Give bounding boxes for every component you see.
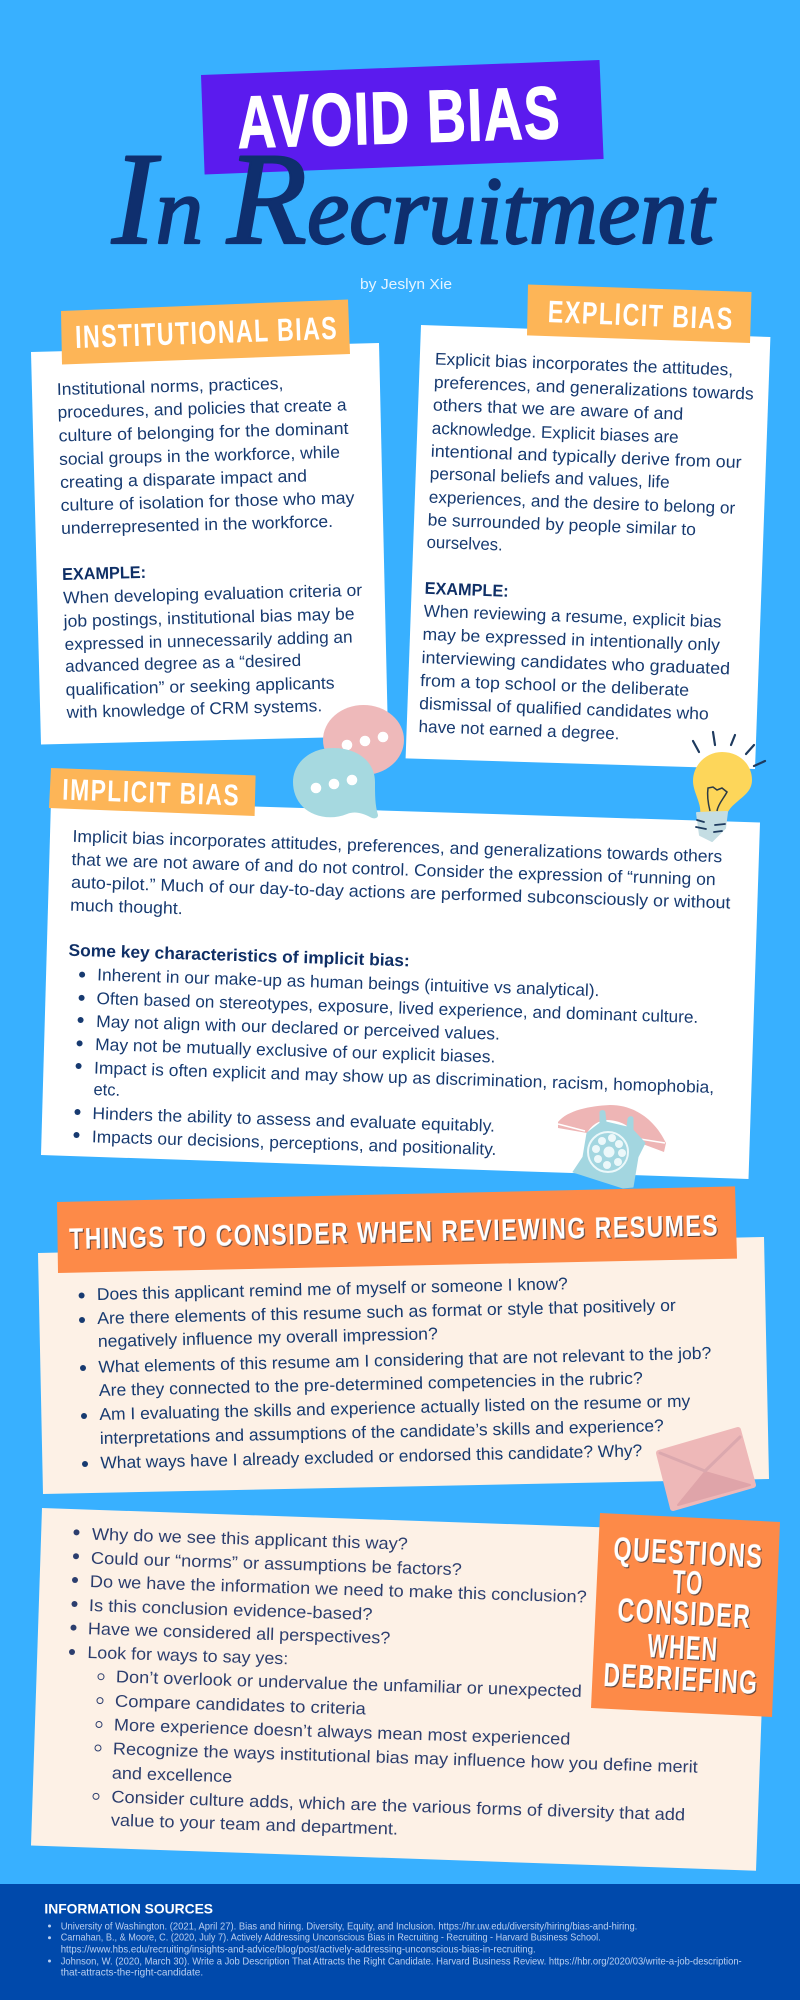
- panel: explicit bias: from a top school or the deliberate: [420, 671, 689, 700]
- panel: institutional bias: creating a disparate impact and: [60, 467, 307, 492]
- panel: institutional bias: qualification” or seeking applicants: [65, 673, 335, 699]
- panel: implicit bias: etc.: [93, 1080, 120, 1100]
- icon: light bulb: [693, 732, 765, 841]
- footer: information sources: that-attracts-the-right-candidate.: [61, 1966, 203, 1978]
- panel: implicit bias: May not be mutually exclusive of our explicit biases.: [95, 1035, 496, 1067]
- panel: institutional bias: EXAMPLE:: [62, 563, 146, 584]
- panel: implicit bias: May not align with our declared or perceived values.: [96, 1012, 500, 1044]
- panel: implicit bias: Some key characteristics of implicit bias:: [68, 941, 410, 970]
- title block: In Recruitment: [111, 125, 716, 272]
- panel: implicit bias: [41, 768, 760, 1179]
- panel: explicit bias: may be expressed in intentionally only: [422, 625, 721, 655]
- panel: implicit bias: much thought.: [70, 896, 183, 918]
- panel: explicit bias: experiences, and the desire to belong or: [428, 488, 736, 518]
- panel: institutional bias: expressed in unnecessarily adding an: [64, 627, 353, 654]
- panel: explicit bias: have not earned a degree.: [418, 717, 620, 743]
- panel: explicit bias: EXPLICIT BIAS: [547, 294, 734, 336]
- footer: information sources: University of Washington. (2021, April 27). Bias and hiring. Diversity, Equity, and Inclusion. https://hr.uw.edu/diversity/hiring/bias-and-hiring.: [61, 1920, 637, 1932]
- panel: institutional bias: underrepresented in the workforce.: [61, 512, 333, 538]
- footer: information sources: Johnson, W. (2020, March 30). Write a Job Description That Attracts the Right Candidate. Harvard Business Review. https://hbr.org/2020/03/write-a-job-description-: [61, 1956, 742, 1968]
- panel: questions to consider when debriefing: Why do we see this applicant this way?: [92, 1525, 408, 1554]
- panel: questions to consider when debriefing: WHEN: [647, 1627, 719, 1668]
- panel: institutional bias: culture of isolation for those who may: [60, 488, 355, 515]
- panel: institutional bias: culture of belonging for the dominant: [58, 419, 349, 445]
- panel: institutional bias: INSTITUTIONAL BIAS: [74, 310, 339, 355]
- panel: explicit bias: preferences, and generalizations towards: [434, 373, 754, 404]
- title block: [111, 60, 716, 272]
- panel: questions to consider when debriefing: Don’t overlook or undervalue the unfamiliar or unexpected: [116, 1667, 582, 1701]
- footer: information sources: [0, 1884, 800, 2000]
- panel: implicit bias: Often based on stereotypes, exposure, lived experience, and dominant culture.: [96, 989, 699, 1027]
- panel: questions to consider when debriefing: Compare candidates to criteria: [115, 1692, 367, 1719]
- panel: explicit bias: EXAMPLE:: [424, 579, 509, 601]
- panel: institutional bias: [31, 300, 388, 744]
- footer: information sources: https://www.hbs.edu/recruiting/insights-and-advice/blog/post/actively-addressing-unconscious-bias-in-recruiting.: [61, 1944, 536, 1956]
- panel: implicit bias: Hinders the ability to assess and evaluate equitably.: [92, 1104, 495, 1136]
- panel: implicit bias: Impacts our decisions, perceptions, and positionality.: [92, 1127, 497, 1159]
- panel: implicit bias: Impact is often explicit and may show up as discrimination, racism, homophobia,: [94, 1059, 714, 1097]
- panel: explicit bias: dismissal of qualified candidates who: [419, 694, 709, 724]
- panel: questions to consider when debriefing: TO: [672, 1563, 705, 1602]
- footer: information sources: Carnahan, B., & Moore, C. (2020, July 7). Actively Addressing Unconscious Bias in Recruiting - Recruiting - Harvard Business School.: [61, 1932, 601, 1944]
- byline: by Jeslyn Xie: [360, 276, 452, 293]
- panel: institutional bias: procedures, and policies that create a: [57, 395, 347, 422]
- panel: institutional bias: When developing evaluation criteria or: [63, 581, 363, 607]
- panel: things to consider when reviewing resumes: Does this applicant remind me of myself or someone I know?: [97, 1274, 568, 1304]
- panel: explicit bias: others that we are aware of and: [433, 396, 684, 424]
- panel: questions to consider when debriefing: Recognize the ways institutional bias may influence how you define merit: [113, 1739, 698, 1777]
- panel: institutional bias: social groups in the workforce, while: [59, 443, 340, 469]
- panel: questions to consider when debriefing: value to your team and department.: [111, 1811, 398, 1839]
- panel: things to consider when reviewing resumes: Are they connected to the pre-determined competencies in the rubric?: [99, 1369, 643, 1400]
- panel: questions to consider when debriefing: Is this conclusion evidence-based?: [89, 1596, 373, 1624]
- icon: speech bubbles: [293, 705, 404, 818]
- panel: things to consider when reviewing resumes: interpretations and assumptions of the candidate’s skills and experience?: [100, 1416, 664, 1448]
- icon: telephone: [558, 1105, 666, 1188]
- panel: things to consider when reviewing resumes: What ways have I already excluded or endorsed this candidate? Why?: [100, 1441, 642, 1472]
- panel: questions to consider when debriefing: Do we have the information we need to make this conclusion?: [90, 1572, 587, 1607]
- panel: implicit bias: IMPLICIT BIAS: [62, 774, 241, 812]
- panel: explicit bias: When reviewing a resume, explicit bias: [423, 602, 722, 631]
- panel: questions to consider when debriefing: Look for ways to say yes:: [87, 1643, 289, 1668]
- panel: explicit bias: Explicit bias incorporates the attitudes,: [435, 350, 734, 379]
- icon: envelope: [659, 1430, 753, 1508]
- panel: explicit bias: be surrounded by people similar to: [427, 510, 696, 539]
- panel: questions to consider when debriefing: and excellence: [112, 1764, 233, 1786]
- panel: explicit bias: interviewing candidates who graduated: [421, 648, 730, 678]
- panel: institutional bias: Institutional norms, practices,: [57, 374, 284, 399]
- panel: explicit bias: intentional and typically derive from our: [430, 442, 742, 472]
- panel: questions to consider when debriefing: Could our “norms” or assumptions be factors?: [91, 1549, 462, 1579]
- panel: institutional bias: job postings, institutional bias may be: [62, 604, 355, 631]
- panel: institutional bias: with knowledge of CRM systems.: [65, 696, 322, 722]
- panel: questions to consider when debriefing: More experience doesn’t always mean most experienced: [114, 1715, 571, 1749]
- panel: implicit bias: auto-pilot.” Much of our day-to-day actions are performed subconsciously or without: [71, 873, 731, 913]
- panel: implicit bias: Implicit bias incorporates attitudes, preferences, and generalizations towards others: [72, 827, 723, 866]
- panel: things to consider when reviewing resumes: negatively influence my overall impression?: [98, 1324, 438, 1351]
- panel: things to consider when reviewing resumes: [38, 1186, 769, 1494]
- panel: explicit bias: personal beliefs and values, life: [429, 464, 670, 492]
- panel: things to consider when reviewing resumes: What elements of this resume am I considering that are not relevant to the job?: [98, 1344, 711, 1377]
- panel: institutional bias: advanced degree as a “desired: [65, 651, 301, 676]
- footer: information sources: INFORMATION SOURCES: [44, 1900, 213, 1916]
- panel: things to consider when reviewing resumes: Are there elements of this resume such as format or style that positively or: [97, 1296, 676, 1328]
- panel: implicit bias: that we are not aware of and do not control. Consider the expression of “running on: [71, 850, 716, 889]
- title block: AVOID BIAS: [236, 71, 562, 164]
- panel: explicit bias: ourselves.: [426, 533, 503, 554]
- panel: questions to consider when debriefing: Have we considered all perspectives?: [88, 1619, 391, 1648]
- panel: questions to consider when debriefing: Consider culture adds, which are the various forms of diversity that add: [111, 1787, 685, 1824]
- panel: things to consider when reviewing resumes: Am I evaluating the skills and experience actually listed on the resume or my: [99, 1392, 691, 1424]
- panel: explicit bias: [406, 284, 770, 769]
- panel: questions to consider when debriefing: [31, 1508, 780, 1871]
- panel: implicit bias: Inherent in our make-up as human beings (intuitive vs analytical).: [97, 965, 600, 1000]
- panel: explicit bias: acknowledge. Explicit biases are: [431, 419, 679, 447]
